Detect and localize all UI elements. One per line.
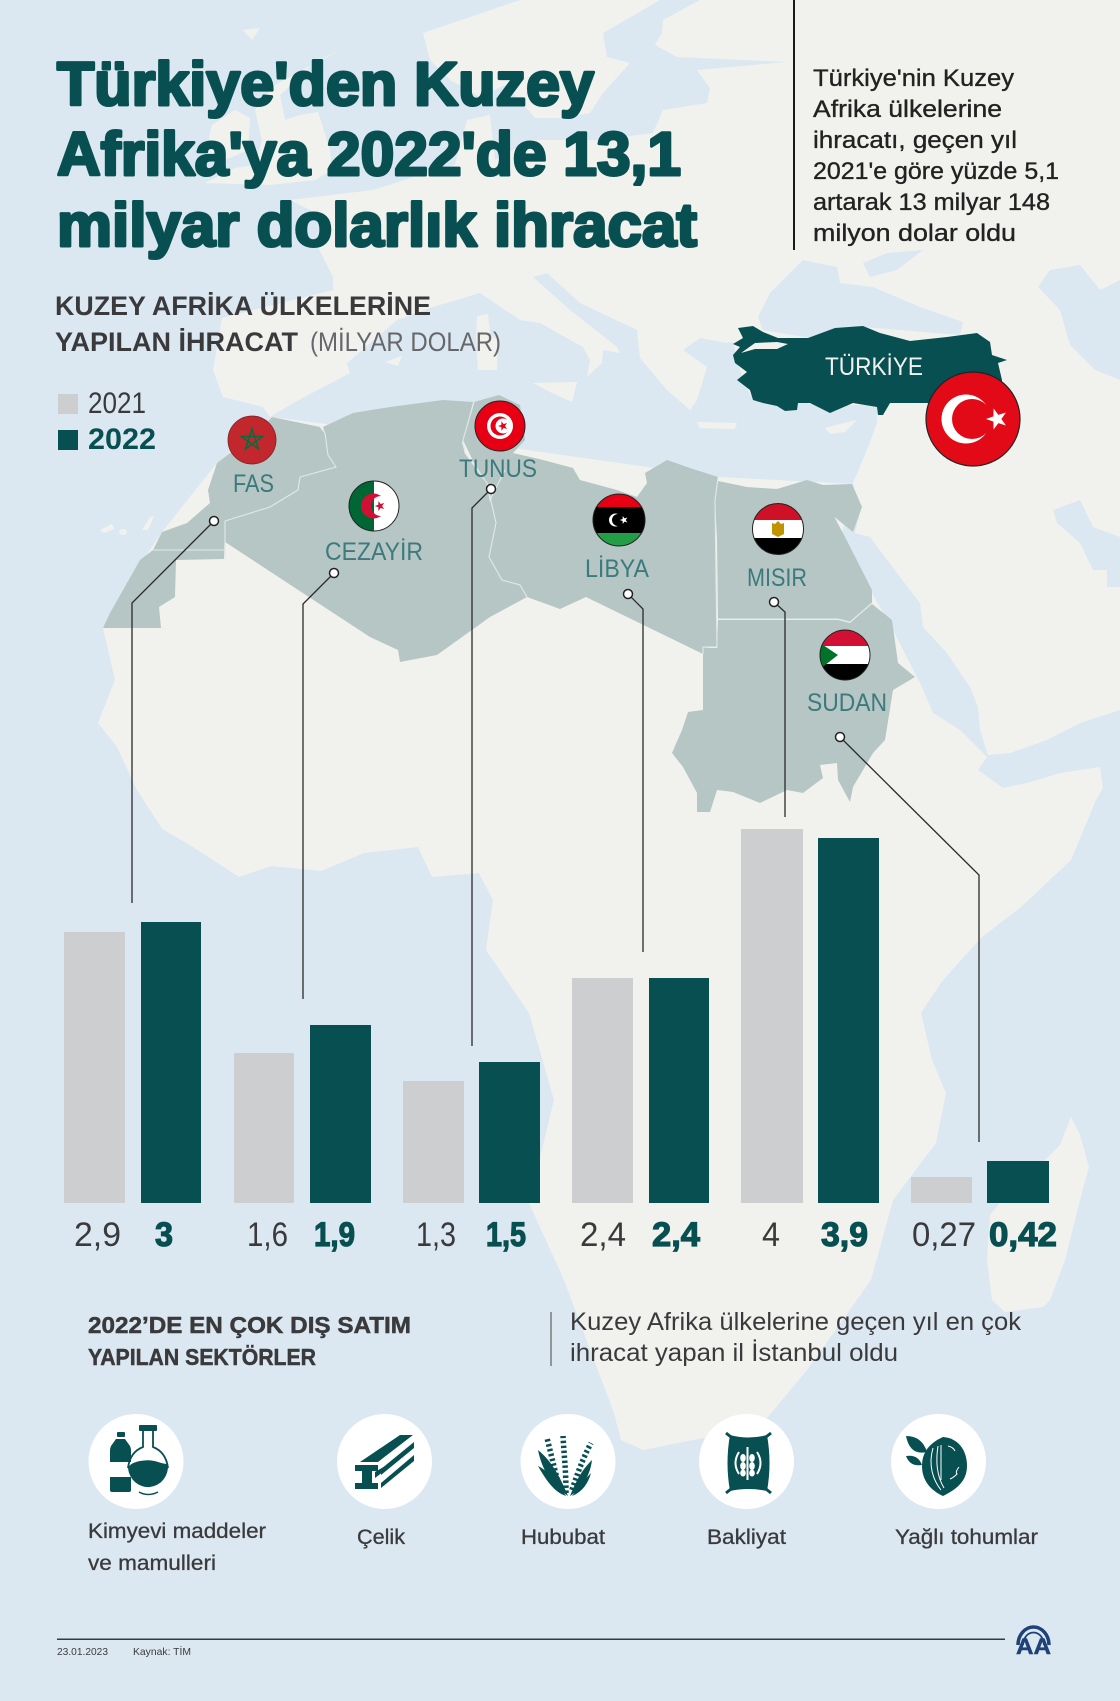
country labels	[233, 455, 887, 717]
flag: Morocco	[228, 416, 276, 464]
legend: 2021	[88, 387, 146, 420]
intro text: artarak 13 milyar 148	[813, 189, 1050, 216]
sector labels: Bakliyat	[707, 1526, 786, 1549]
sector labels: Çelik	[357, 1526, 406, 1549]
footer text: Kaynak: TİM	[133, 1645, 191, 1658]
bars: Sudan	[911, 1161, 1049, 1203]
İstanbul note: ihracat yapan il İstanbul oldu	[570, 1338, 898, 1367]
bars: Cezayir	[234, 1025, 371, 1203]
icon: chemicals	[88, 1414, 184, 1509]
chart heading: KUZEY AFRİKA ÜLKELERİNE	[55, 291, 431, 321]
land: Great Britain	[205, 50, 340, 185]
icon: grain	[520, 1414, 616, 1509]
bars: Libya	[572, 978, 709, 1203]
footer text: 23.01.2023	[57, 1646, 108, 1658]
sector labels: Hububat	[521, 1526, 605, 1549]
footer text	[57, 1645, 191, 1658]
flag: Sudan	[820, 630, 870, 681]
intro text: milyon dolar oldu	[813, 220, 1016, 247]
bar values 2021: 2,4	[580, 1216, 626, 1254]
country: Türkiye	[733, 326, 1007, 420]
land: Eurasia	[213, 0, 1120, 755]
chart heading: YAPILAN İHRACAT	[55, 327, 299, 357]
sector labels	[88, 1520, 1038, 1575]
intro text: 2021'e göre yüzde 5,1	[813, 158, 1059, 185]
country labels: SUDAN	[807, 689, 887, 717]
bar values 2021: 4	[762, 1216, 780, 1254]
flag: Tunisia	[475, 401, 525, 451]
bar values 2022: 1,9	[314, 1216, 355, 1254]
sectors heading: YAPILAN SEKTÖRLER	[88, 1344, 316, 1370]
bar values 2022: 3	[155, 1216, 173, 1254]
bar values 2021: 1,6	[247, 1216, 288, 1254]
country: Tunisia	[463, 395, 525, 500]
land: Africa	[98, 417, 1103, 1450]
footer line	[57, 1638, 1005, 1640]
bar values 2021: 0,27	[912, 1216, 976, 1254]
intro text	[813, 65, 1059, 247]
country labels: TUNUS	[459, 455, 537, 483]
land: Scandinavia	[423, 0, 660, 118]
icon: steel beam	[337, 1414, 432, 1509]
title: Türkiye'den Kuzey	[57, 50, 594, 118]
flag: Algeria	[349, 481, 399, 531]
bar values 2022	[155, 1216, 1057, 1254]
islands	[100, 28, 857, 535]
country labels: CEZAYİR	[325, 537, 423, 566]
North Africa highlighted countries	[103, 395, 915, 812]
icon: sack	[699, 1414, 794, 1509]
intro text: Afrika ülkelerine	[813, 96, 1002, 123]
country: Sudan	[672, 604, 915, 812]
intro text: Türkiye'nin Kuzey	[813, 65, 1014, 92]
country labels: LİBYA	[585, 554, 649, 583]
İstanbul note	[570, 1308, 1022, 1367]
sea: Black Sea	[758, 260, 963, 338]
flag: Türkiye	[926, 372, 1020, 466]
bar values 2021: 1,3	[416, 1216, 456, 1254]
country: Algeria	[225, 400, 527, 662]
sectors heading: 2022’DE EN ÇOK DIŞ SATIM	[88, 1312, 411, 1338]
sector labels: Yağlı tohumlar	[895, 1526, 1038, 1549]
country: Morocco	[103, 417, 336, 628]
sea of Marmara	[741, 342, 788, 353]
sea: Persian Gulf	[1053, 500, 1120, 587]
logo: AA: AA	[1016, 1634, 1051, 1659]
title: Afrika'ya 2022'de 13,1	[57, 120, 681, 188]
sectors heading	[88, 1312, 411, 1370]
bar values 2022: 0,42	[989, 1216, 1057, 1254]
flag: Egypt	[752, 503, 804, 555]
bar values 2022: 2,4	[652, 1216, 700, 1254]
leader lines	[132, 484, 979, 1142]
land: Madagascar	[987, 1117, 1089, 1312]
country labels: FAS	[233, 470, 274, 498]
country labels: MISIR	[747, 564, 807, 592]
bar values 2021	[74, 1216, 976, 1254]
chart heading: (MİLYAR DOLAR)	[310, 326, 501, 357]
title	[57, 50, 697, 259]
bars: Fas	[64, 922, 201, 1203]
sea: Caspian	[1038, 265, 1120, 380]
bars: Mısır	[741, 829, 879, 1203]
icon: oilseed	[891, 1414, 986, 1509]
sectors divider	[550, 1312, 552, 1366]
country borders	[153, 402, 872, 654]
sector labels: ve mamulleri	[88, 1552, 216, 1575]
bar values 2021: 2,9	[74, 1216, 121, 1254]
intro divider	[793, 0, 795, 250]
label: Türkiye: TÜRKİYE	[825, 352, 923, 381]
bars: Tunus	[403, 1062, 540, 1203]
flag: Libya	[593, 494, 645, 546]
sector labels: Kimyevi maddeler	[88, 1520, 266, 1543]
country: Egypt	[715, 480, 872, 622]
legend	[58, 387, 156, 456]
bar values 2022: 1,5	[486, 1216, 526, 1254]
land: Ireland	[205, 110, 250, 160]
intro text: ihracatı, geçen yıl	[813, 127, 1017, 154]
sea: Azov	[863, 250, 923, 277]
İstanbul note: Kuzey Afrika ülkelerine geçen yıl en çok	[570, 1308, 1022, 1336]
country: Libya	[489, 453, 718, 654]
legend: 2022	[88, 423, 156, 456]
title: milyar dolarlık ihracat	[57, 191, 697, 259]
bar chart	[64, 829, 1057, 1254]
bar values 2022: 3,9	[821, 1216, 868, 1254]
chart heading	[55, 291, 501, 357]
